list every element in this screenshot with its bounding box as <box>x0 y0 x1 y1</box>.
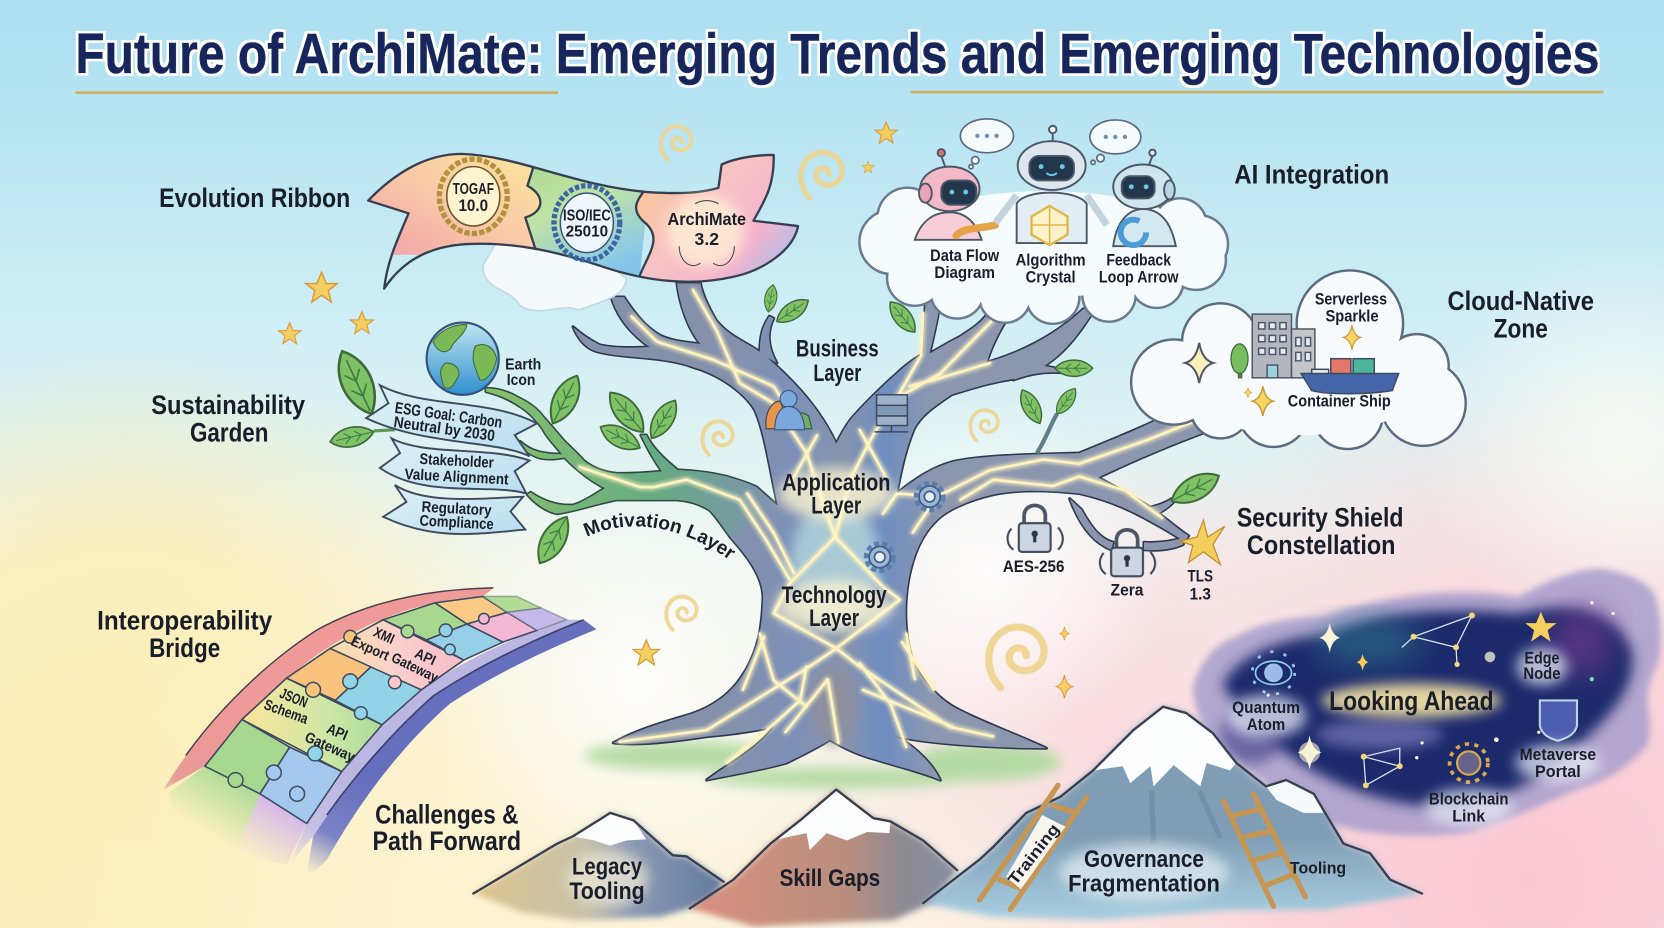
archimate badge <box>668 195 746 267</box>
captions with halo <box>1226 647 1600 827</box>
cloud captions <box>1288 290 1391 410</box>
captions: JSON <box>277 686 310 712</box>
mountain: legacy tooling: Legacy <box>572 853 642 880</box>
heading: application layer: Application <box>782 469 890 496</box>
tree icon <box>1231 344 1248 378</box>
captions: TLS <box>1188 567 1213 586</box>
captions with halo: Node <box>1523 664 1561 683</box>
heading: cloud-native zone: Zone <box>1494 313 1548 343</box>
mountain: skill gaps <box>690 790 957 926</box>
heading: application layer <box>778 468 895 520</box>
cloud captions: Container Ship <box>1288 391 1391 410</box>
captions: 1.3 <box>1190 585 1211 604</box>
captions: Schema <box>262 697 311 728</box>
label: governance fragmentation <box>1068 846 1220 897</box>
mountain: governance fragmentation <box>923 707 1422 920</box>
ladder: training <box>980 785 1087 909</box>
captions with halo: Portal <box>1535 762 1581 781</box>
heading: security shield constellation <box>1237 502 1403 560</box>
title underline left <box>75 91 558 94</box>
heading: technology layer: Technology <box>782 582 887 609</box>
banner: stakeholder: Stakeholder <box>419 451 494 472</box>
heading: evolution ribbon: Evolution Ribbon <box>159 183 350 213</box>
panel: security shield constellation <box>1003 505 1225 604</box>
captions: API <box>412 646 438 669</box>
cloud captions: Sparkle <box>1325 307 1379 326</box>
banner: esg goal <box>366 385 537 456</box>
cloud captions: Crystal <box>1026 267 1076 286</box>
ground under tree <box>584 741 1061 788</box>
data flow icon <box>956 225 995 236</box>
robot: right <box>1113 150 1176 246</box>
decorative stars and spirals <box>279 122 1073 698</box>
pale glow centre of trunk <box>791 501 880 624</box>
cloud captions: Feedback <box>1106 250 1172 269</box>
cloud captions: Algorithm <box>1016 250 1086 269</box>
heading: business layer <box>796 336 879 387</box>
small cloud under ribbon <box>483 239 626 311</box>
cloud captions: Data Flow <box>930 246 1000 265</box>
heading: sustainability garden <box>151 390 305 447</box>
banner: stakeholder: Value Alignment <box>404 466 509 489</box>
outer band edge line <box>186 588 493 756</box>
captions with halo: Atom <box>1247 715 1285 734</box>
thought bubble left <box>960 119 1013 169</box>
lock: zero <box>1100 530 1155 576</box>
puzzle knobs <box>228 613 489 801</box>
container ship <box>1301 359 1399 394</box>
puzzle pieces <box>205 596 567 824</box>
captions <box>262 625 441 766</box>
heading: sustainability garden: Garden <box>190 417 268 447</box>
violet band edge line <box>327 620 584 815</box>
outer rainbow band <box>163 588 493 790</box>
captions with halo: Blockchain <box>1429 789 1509 808</box>
panel: ai integration cloud <box>860 119 1228 324</box>
ribbon fold <box>718 155 774 191</box>
cloud captions: Loop Arrow <box>1099 267 1179 286</box>
lock: aes <box>1008 505 1063 552</box>
label: governance fragmentation: Fragmentation <box>1068 870 1220 897</box>
heading: interoperability bridge: Bridge <box>149 633 220 663</box>
cloud captions: Serverless <box>1315 290 1387 309</box>
archimate badge: ArchiMate <box>668 209 746 229</box>
icon: server <box>874 395 908 432</box>
fading lower pieces <box>168 766 260 854</box>
captions <box>1003 557 1213 604</box>
cloud shape <box>860 188 1228 324</box>
panel: evolution ribbon <box>361 149 807 311</box>
panel: sustainability garden <box>328 284 1224 569</box>
heading: interoperability bridge: Interoperability <box>97 605 272 635</box>
captions: Gateway <box>389 650 441 686</box>
label: tooling: Tooling <box>1290 858 1346 877</box>
heading: security shield constellation: Constellation <box>1247 530 1396 560</box>
icon: business people <box>766 391 812 430</box>
heading: sustainability garden: Sustainability <box>151 390 305 420</box>
heading: ai integration: AI Integration <box>1234 160 1389 190</box>
heading: challenges and path forward: Path Forward <box>372 826 521 856</box>
captions with halo: Metaverse <box>1520 745 1596 764</box>
glowing lines on the tree <box>579 290 1199 763</box>
title underline right <box>911 91 1604 93</box>
lilac band <box>289 620 584 865</box>
panel: cloud-native zone <box>1131 271 1466 449</box>
curve path for motivation label <box>587 526 756 582</box>
label: governance fragmentation: Governance <box>1084 846 1204 873</box>
iso medal: ISO/IEC <box>563 208 611 225</box>
ribbon outline <box>368 154 798 289</box>
captions: AES-256 <box>1003 557 1064 576</box>
iso medal: 25010 <box>566 224 608 241</box>
fading lilac piece <box>236 794 307 865</box>
togaf medal <box>439 159 507 233</box>
tree with branches <box>486 283 1220 780</box>
robot: pink <box>915 149 982 240</box>
banner: stakeholder <box>380 438 530 493</box>
nebula stars <box>1267 601 1615 769</box>
violet band <box>306 620 596 881</box>
heading: challenges and path forward: Challenges & <box>375 800 518 830</box>
label: training: Training <box>1005 821 1063 888</box>
metaverse portal icon <box>1540 700 1577 741</box>
captions: Export <box>348 633 392 665</box>
algorithm crystal icon <box>1032 206 1068 245</box>
ladder: tooling <box>1224 794 1305 906</box>
captions with halo: Edge <box>1524 648 1559 667</box>
heading: technology layer <box>776 580 892 632</box>
heading: challenges and path forward <box>372 800 521 856</box>
heading: business layer: Business <box>796 336 879 363</box>
earth caption: Earth <box>505 356 541 373</box>
heading: looking ahead: Looking Ahead <box>1329 686 1494 716</box>
cloud captions <box>930 246 1179 286</box>
heading: cloud-native zone: Cloud-Native <box>1448 286 1594 316</box>
mountain: skill gaps: Skill Gaps <box>779 865 880 892</box>
heading: security shield constellation: Security Shield <box>1237 502 1403 532</box>
captions with halo: Quantum <box>1232 698 1300 717</box>
mountain: legacy tooling <box>473 813 724 920</box>
star: tls <box>1180 520 1225 565</box>
panel: interoperability bridge <box>163 588 596 881</box>
edge node star <box>1525 612 1557 642</box>
thought bubble right <box>1090 120 1141 164</box>
feedback loop icon <box>1121 220 1146 245</box>
banner: regulatory <box>383 485 525 534</box>
earth icon <box>427 323 499 395</box>
banner: regulatory: Regulatory <box>421 499 492 519</box>
icon: gear lower <box>867 544 892 570</box>
heading: business layer: Layer <box>813 360 862 387</box>
banner: esg goal: Neutral by 2030 <box>393 414 496 445</box>
iso medal <box>554 186 620 260</box>
nebula cloud <box>1193 569 1661 836</box>
constellations <box>1361 613 1475 788</box>
heading: motivation layer: Motivation Layer <box>583 513 736 558</box>
icon: gear upper <box>917 484 942 509</box>
earth caption <box>505 356 541 389</box>
earth caption: Icon <box>507 372 535 389</box>
captions: API <box>324 721 350 744</box>
building <box>1252 314 1315 378</box>
archimate badge: 3.2 <box>695 229 719 249</box>
heading: technology layer: Layer <box>809 605 859 632</box>
heading: interoperability bridge <box>97 605 272 663</box>
heading: application layer: Layer <box>811 493 862 520</box>
captions: Gateway <box>302 730 358 766</box>
label: training <box>1005 815 1065 889</box>
mountain: legacy tooling: Tooling <box>569 878 645 905</box>
captions: Zera <box>1111 580 1144 599</box>
cloud captions: Diagram <box>934 263 995 282</box>
robot: centre <box>995 126 1107 243</box>
sparkles <box>1185 325 1361 416</box>
grey centre of lower trunk <box>810 668 856 744</box>
blockchain icon <box>1450 744 1488 782</box>
panel: looking ahead nebula <box>1193 569 1661 836</box>
heading: cloud-native zone <box>1448 286 1594 343</box>
captions: XMI <box>371 625 397 648</box>
ribbon colours <box>370 155 796 281</box>
banner: regulatory: Compliance <box>419 513 494 533</box>
togaf medal: 10.0 <box>458 196 488 215</box>
leaves <box>328 284 1224 569</box>
togaf medal: TOGAF <box>453 181 494 198</box>
quantum atom icon <box>1252 652 1295 694</box>
captions with halo: Link <box>1452 806 1486 825</box>
banner: esg goal: ESG Goal: Carbon <box>394 400 503 432</box>
cloud shape <box>1131 271 1466 449</box>
